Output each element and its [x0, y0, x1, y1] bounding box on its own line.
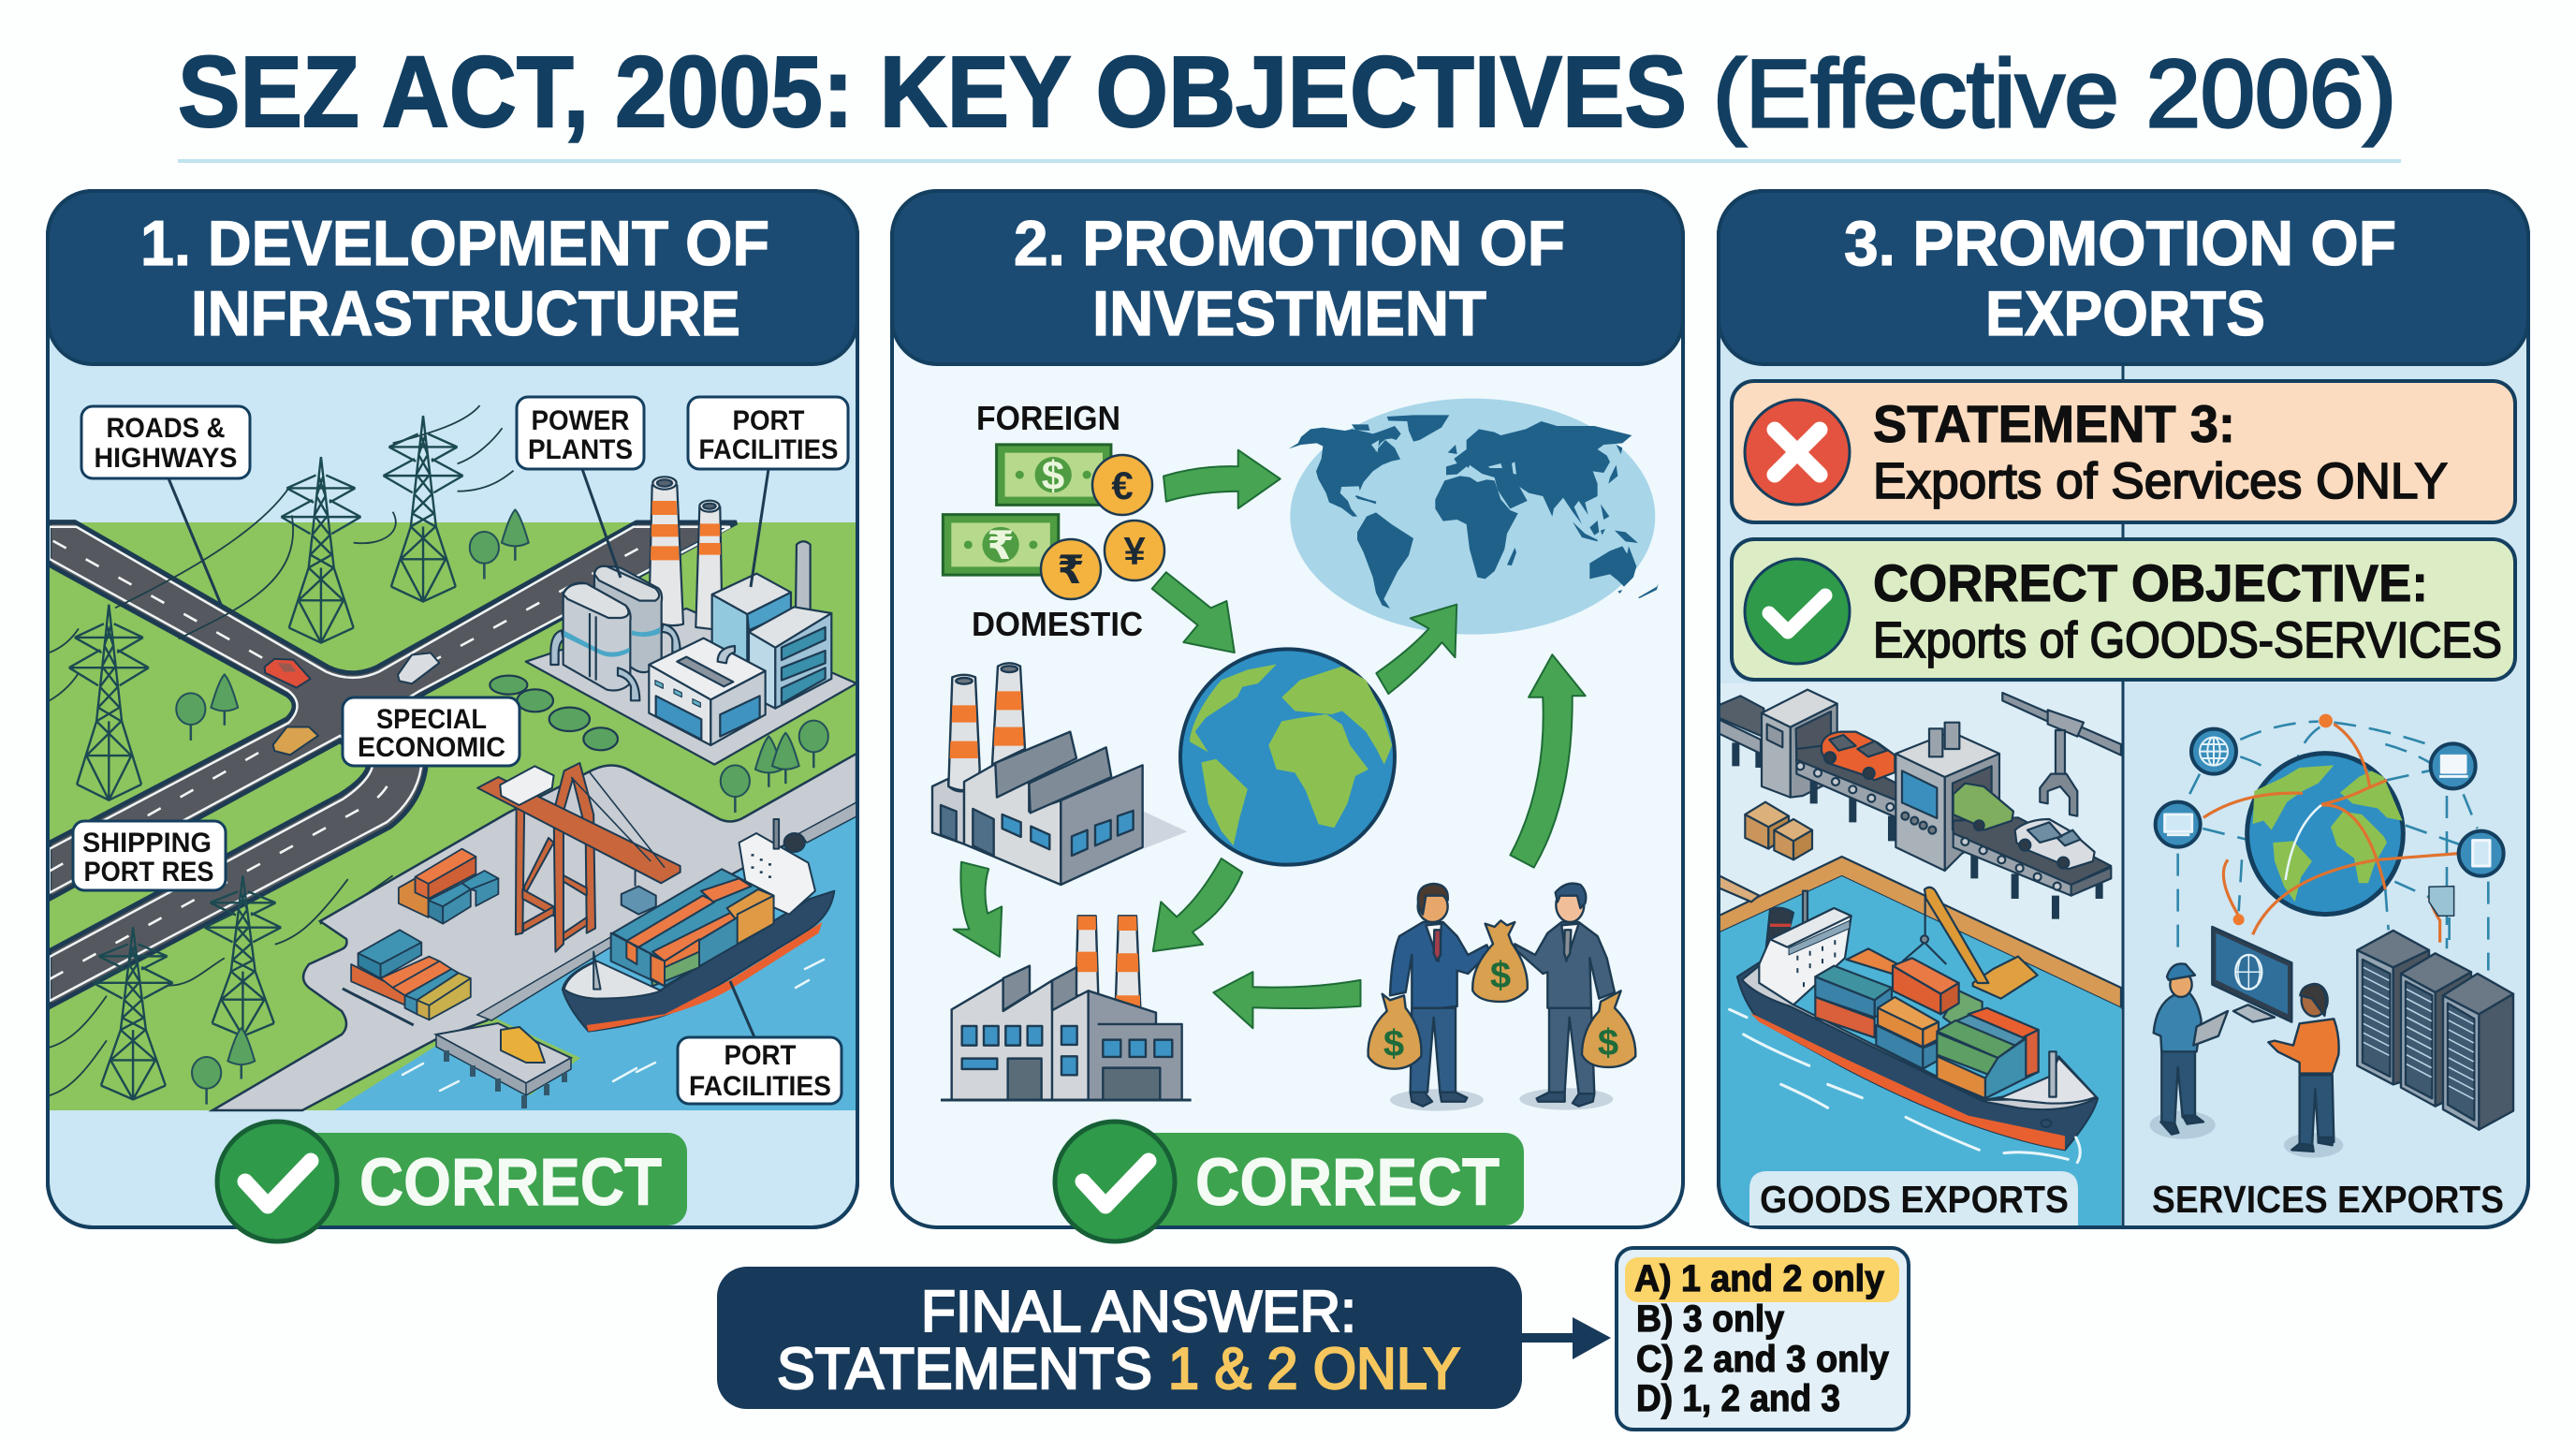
options box: B) 3 only: [1636, 1299, 1785, 1340]
power plant: [490, 477, 856, 765]
label: power plants: PLANTS: [528, 434, 633, 465]
header: development of infrastructure: INFRASTRUCTURE: [191, 278, 740, 349]
container stacks: [343, 849, 498, 1025]
conveyor middle: [1814, 780, 1892, 841]
label: power plants: POWER: [532, 405, 630, 436]
globe: [1180, 649, 1395, 865]
label: port facilities top: PORT: [732, 405, 805, 436]
goods: conveyor, dock and ship: [1719, 690, 2121, 1233]
coins and currency symbols: [987, 453, 1618, 1064]
services: network, globe, people, servers: [2150, 714, 2513, 1158]
callout: statement 3 incorrect: [1732, 381, 2515, 522]
final answer box: STATEMENTS: [777, 1337, 1152, 1401]
person right: [2268, 984, 2343, 1158]
arrow: answer to options: [1522, 1317, 1611, 1359]
factory upper: [932, 663, 1187, 885]
label: roads and highways: [81, 406, 250, 607]
person left: [2150, 963, 2228, 1139]
coins and currency symbols: $: [1383, 1023, 1404, 1064]
conveyor front: [1974, 855, 2100, 919]
green and white cars: [1954, 784, 2013, 830]
coins and currency symbols: ¥: [1123, 529, 1146, 573]
label: roads and highways: HIGHWAYS: [94, 443, 238, 474]
red car: [1822, 732, 1895, 780]
label: foreign: FOREIGN: [976, 399, 1120, 437]
panel: promotion of investment: [892, 191, 1683, 1241]
label: special economic: ECONOMIC: [358, 732, 505, 763]
header: promotion of exports: 3. PROMOTION OF: [1844, 208, 2396, 279]
ship loading crane: [1973, 957, 2038, 999]
label: special economic: SPECIAL: [376, 704, 487, 735]
machine one: [1791, 704, 1837, 798]
header: promotion of investment: 2. PROMOTION OF: [1014, 208, 1565, 279]
panel: development of infrastructure: [48, 191, 857, 1241]
banknotes: [943, 445, 1111, 575]
ship hull: [1737, 962, 2098, 1150]
trees: [176, 509, 828, 1105]
label: port facilities bottom: PORT: [724, 1040, 796, 1071]
machine two: [1945, 754, 1999, 871]
callout: statement 3 incorrect: Exports of Services ONLY: [1873, 453, 2448, 509]
header: promotion of exports: EXPORTS: [1985, 278, 2265, 349]
gantry crane: [477, 763, 681, 952]
callout: statement 3 incorrect: STATEMENT 3:: [1873, 394, 2235, 453]
header: promotion of investment: [892, 191, 1683, 364]
badge: correct 2: [1055, 1122, 1524, 1241]
coins and currency symbols: $: [1490, 955, 1511, 996]
coins and currency symbols: $: [1598, 1022, 1618, 1064]
coins and currency symbols: €: [1111, 463, 1134, 507]
boxes: [1745, 814, 1768, 849]
label: services exports: SERVICES EXPORTS: [2152, 1178, 2504, 1221]
badge: correct 1: CORRECT: [359, 1146, 662, 1220]
world map: [1289, 399, 1659, 635]
divider: [2121, 364, 2125, 1227]
label: port facilities top: [688, 397, 848, 587]
cars: [265, 653, 439, 755]
badge: correct 1: [217, 1122, 687, 1241]
title: (Effective 2006): [1713, 40, 2396, 147]
monitor: [2212, 927, 2291, 1022]
header: development of infrastructure: 1. DEVELOPMENT OF: [140, 208, 769, 279]
pylons: [69, 416, 463, 1099]
final answer box: FINAL ANSWER:: [921, 1280, 1356, 1344]
coins and currency symbols: ₹: [987, 522, 1015, 568]
flow arrows: [954, 450, 1586, 1028]
options box: [1617, 1248, 1909, 1430]
coins and currency symbols: $: [1042, 453, 1064, 499]
final answer box: 1 & 2 ONLY: [1168, 1337, 1460, 1401]
label: special economic: [343, 697, 520, 766]
label: goods exports: GOODS EXPORTS: [1760, 1178, 2069, 1221]
conveyor back: [1735, 742, 1759, 768]
label: shipping port res: PORT RES: [84, 857, 213, 888]
coins and currency symbols: ₹: [1057, 547, 1085, 593]
cargo ship: [563, 819, 834, 1032]
label: power plants: [517, 397, 644, 578]
highlighted option: [1625, 1257, 1899, 1302]
final answer box: [717, 1267, 1522, 1409]
ship containers: [1847, 948, 1898, 974]
callout: correct objective: CORRECT OBJECTIVE:: [1873, 553, 2428, 612]
header: development of infrastructure: [48, 191, 857, 364]
label: port facilities top: FACILITIES: [698, 434, 839, 465]
businessmen with money bags: [1368, 884, 1635, 1111]
label: shipping port res: [73, 821, 226, 890]
power lines: [50, 405, 514, 1095]
label: shipping port res: SHIPPING: [82, 828, 212, 858]
badge: correct 2: CORRECT: [1195, 1146, 1500, 1220]
roads: [50, 522, 737, 1007]
racks: [2357, 931, 2513, 1130]
illustration: infrastructure scene: [50, 405, 856, 1110]
label: port facilities bottom: FACILITIES: [689, 1071, 831, 1102]
label: roads and highways: ROADS &: [107, 413, 225, 444]
illustration: goods and services: [1719, 364, 2513, 1233]
options box: A) 1 and 2 only: [1634, 1258, 1885, 1299]
panel: promotion of exports: [1719, 191, 2528, 1233]
label: domestic: DOMESTIC: [972, 605, 1143, 643]
title: SEZ ACT, 2005: KEY OBJECTIVES: [178, 35, 1687, 148]
label: port facilities bottom: [678, 981, 842, 1104]
factory lower: [941, 916, 1192, 1100]
port land and water: [212, 754, 856, 1110]
callout: correct objective: [1732, 539, 2515, 680]
robot arm: [2002, 693, 2121, 756]
header: promotion of exports: [1719, 191, 2528, 364]
options box: D) 1, 2 and 3: [1636, 1378, 1840, 1419]
header: promotion of investment: INVESTMENT: [1092, 278, 1486, 349]
options box: C) 2 and 3 only: [1636, 1339, 1890, 1380]
callout: correct objective: Exports of GOODS-SERVICES: [1873, 612, 2502, 668]
